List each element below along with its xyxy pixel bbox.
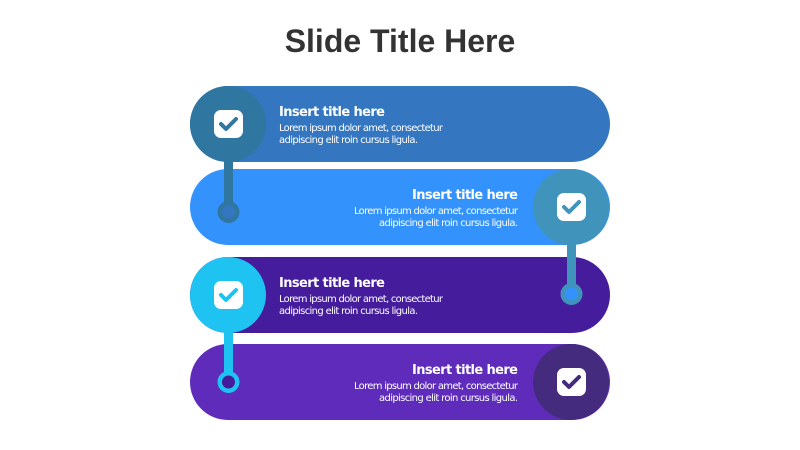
panel: item 2 bar [190,169,610,245]
item 2 text: Lorem ipsum dolor amet, consectetur [354,206,519,217]
item 3 text: Insert title here [279,276,385,291]
panel: item 4 bar [190,344,610,420]
item 1 text: Insert title here [279,105,385,120]
item 2 text [354,188,519,229]
item 3 text: Lorem ipsum dolor amet, consectetur [279,294,444,305]
item 3 text: adipiscing elit roin cursus ligula. [279,306,418,317]
panel: item 3 bar [190,257,610,333]
item 4 text: Insert title here [412,363,518,378]
panel: item 1 bar [190,86,610,162]
connector 3 [218,320,240,393]
icon circle 3 [190,257,266,333]
item 1 text [279,105,444,146]
item 3 text [279,276,444,317]
item 2 text: adipiscing elit roin cursus ligula. [379,218,518,229]
icon circle 1 [190,86,266,162]
item 4 text: adipiscing elit roin cursus ligula. [379,393,518,404]
icon circle 4 [533,344,609,420]
icon circle 2 [533,169,609,245]
connector 1 [218,150,240,223]
connector 2 [560,235,582,305]
item 4 text [354,363,519,404]
title: Slide Title Here [285,23,515,59]
item 1 text: Lorem ipsum dolor amet, consectetur [279,123,444,134]
item 4 text: Lorem ipsum dolor amet, consectetur [354,381,519,392]
item 1 text: adipiscing elit roin cursus ligula. [279,135,418,146]
item 2 text: Insert title here [412,188,518,203]
